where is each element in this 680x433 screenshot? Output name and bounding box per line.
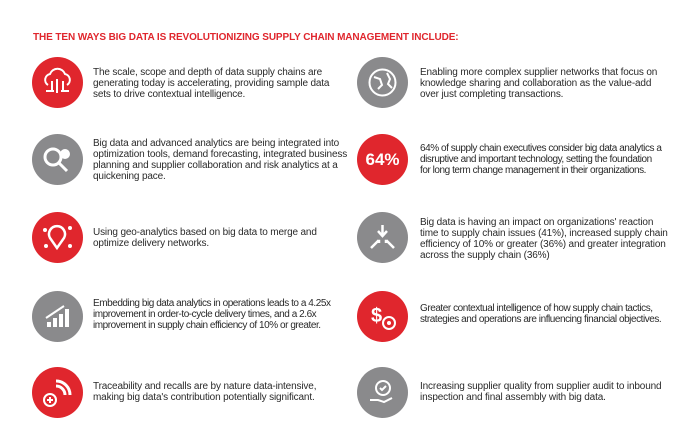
icon: gears magnifier [32, 134, 83, 185]
text 7: disruptive and important technology, setting the foundation [420, 154, 652, 165]
text 9 [420, 303, 661, 325]
text 2 [93, 138, 347, 182]
text 8 [420, 217, 668, 261]
text 10: Increasing supplier quality from supplier audit to inbound [420, 381, 661, 392]
text 7: 64% of supply chain executives consider big data analytics a [420, 143, 662, 154]
text 1 [93, 67, 330, 100]
text 9: strategies and operations are influencing financial objectives. [420, 314, 661, 325]
text 1: sets to drive contextual intelligence. [93, 89, 245, 100]
text 8: efficiency of 10% or greater (36%) and greater integration [420, 239, 666, 250]
text 3: optimize delivery networks. [93, 238, 209, 249]
text 9: Greater contextual intelligence of how supply chain tactics, [420, 303, 653, 314]
text 2: planning and supplier collaboration and risk analytics at a [93, 160, 338, 171]
text 8: time to supply chain issues (41%), increased supply chain [420, 228, 668, 239]
icon: dollar target [357, 291, 408, 342]
icon: globe [357, 57, 408, 108]
text 10: inspection and final assembly with big data. [420, 392, 606, 403]
icon: 64% [357, 134, 408, 185]
text 5 [93, 381, 316, 403]
text 6: Enabling more complex supplier networks that focus on [420, 67, 657, 78]
text 3: Using geo-analytics based on big data to merge and [93, 227, 317, 238]
icon: geo pin [32, 212, 83, 263]
text 10 [420, 381, 661, 403]
icon: arrows converge [357, 212, 408, 263]
text 8: across the supply chain (36%) [420, 250, 550, 261]
icon: 64%: 64% [365, 150, 400, 169]
text 5: Traceability and recalls are by nature data-intensive, [93, 381, 316, 392]
text 2: quickening pace. [93, 171, 166, 182]
text 5: making big data's contribution potentially significant. [93, 392, 315, 403]
text 4: Embedding big data analytics in operations leads to a 4.25x [93, 298, 331, 309]
icon: bar chart [32, 291, 83, 342]
icon: dollar target: $ [371, 305, 382, 327]
text 1: generating today is accelerating, providing sample data [93, 78, 329, 89]
text 6 [420, 67, 657, 100]
text 2: optimization tools, demand forecasting, integrated business [93, 149, 347, 160]
text 4: improvement in supply chain efficiency of 10% or greater. [93, 320, 321, 331]
text 6: over just completing transactions. [420, 89, 563, 100]
text 4 [93, 298, 331, 331]
text 7 [420, 143, 662, 176]
icon: hand check [357, 367, 408, 418]
text 7: for long term change management in their organizations. [420, 165, 646, 176]
text 2: Big data and advanced analytics are being integrated into [93, 138, 339, 149]
text 1: The scale, scope and depth of data supply chains are [93, 67, 322, 78]
icon: signal plus [32, 367, 83, 418]
icon: cloud [32, 57, 83, 108]
text 4: improvement in order-to-cycle delivery times, and a 2.6x [93, 309, 316, 320]
text 6: knowledge sharing and collaboration as the value-add [420, 78, 651, 89]
title: THE TEN WAYS BIG DATA IS REVOLUTIONIZING SUPPLY CHAIN MANAGEMENT INCLUDE: [33, 32, 459, 43]
text 8: Big data is having an impact on organizations' reaction [420, 217, 653, 228]
text 3 [93, 227, 317, 249]
